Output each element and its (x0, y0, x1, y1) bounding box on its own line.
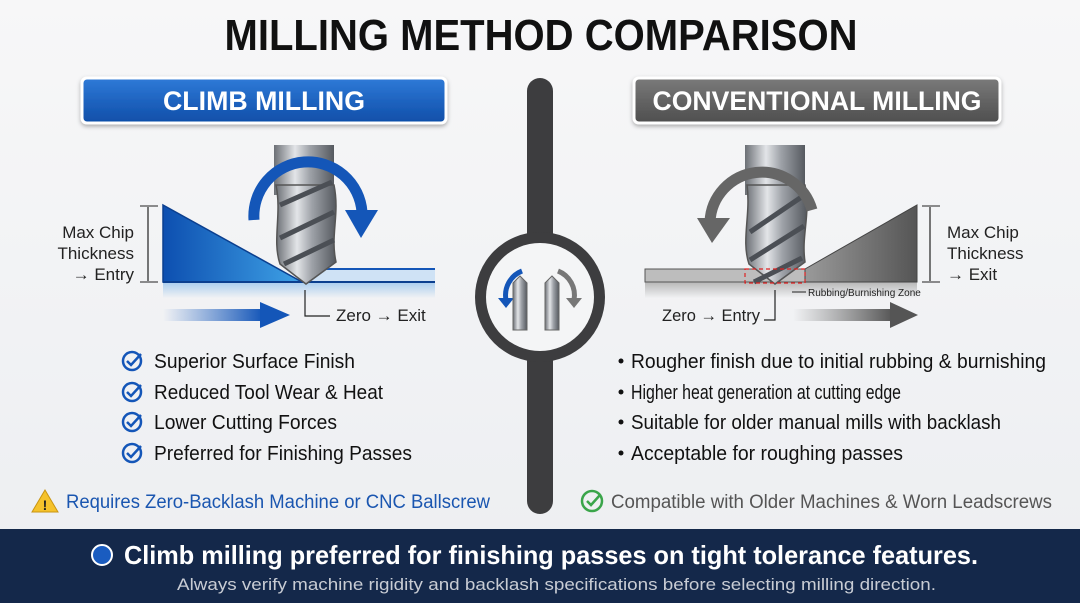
diagram: conventional milling: Zero → Entry (662, 306, 760, 325)
list: climb benefits: Preferred for Finishing Passes (154, 443, 412, 465)
icon: rotation comparison (498, 271, 582, 330)
header: climb milling (82, 78, 446, 123)
title: MILLING METHOD COMPARISON (224, 11, 858, 60)
diagram: conventional milling: Thickness (947, 244, 1024, 263)
warning note: ! (43, 497, 47, 513)
diagram: climb milling: → Entry (73, 265, 134, 284)
list: conventional characteristics: Acceptable for roughing passes (631, 443, 903, 465)
header: conventional milling (634, 78, 1000, 123)
header: conventional milling: CONVENTIONAL MILLING (652, 86, 982, 116)
dimension (147, 207, 149, 281)
list: conventional characteristics: Suitable for older manual mills with backlash (631, 412, 1001, 434)
list: conventional characteristics: Higher heat generation at cutting edge (631, 382, 901, 404)
center divider (475, 78, 605, 514)
diagram: conventional milling: Max Chip (947, 223, 1019, 242)
list: conventional characteristics (618, 351, 1046, 465)
diagram: conventional milling (645, 145, 1024, 328)
list: climb benefits: Superior Surface Finish (154, 351, 355, 373)
header: climb milling: CLIMB MILLING (163, 86, 365, 116)
compatibility note: Compatible with Older Machines & Worn Leadscrews (611, 492, 1052, 513)
diagram: climb milling: Zero → Exit (336, 306, 426, 325)
diagram: climb milling (57, 145, 435, 328)
list: climb benefits: Lower Cutting Forces (154, 412, 337, 434)
bottom banner: Climb milling preferred for finishing passes on tight tolerance features. (124, 540, 978, 570)
diagram: climb milling: Max Chip (62, 223, 134, 242)
list: climb benefits: Reduced Tool Wear & Heat (154, 382, 383, 404)
warning note: Requires Zero-Backlash Machine or CNC Ballscrew (66, 492, 490, 513)
diagram: conventional milling: → Exit (947, 265, 997, 284)
list: conventional characteristics: Rougher finish due to initial rubbing & burnishing (631, 351, 1046, 373)
diagram: climb milling: Thickness (57, 244, 134, 263)
bottom banner (0, 529, 1080, 603)
diagram: conventional milling: Rubbing/Burnishing Zone (808, 288, 921, 299)
list: climb benefits (123, 351, 412, 465)
bottom banner: Always verify machine rigidity and backlash specifications before selecting milling direction. (177, 575, 936, 594)
tool (274, 145, 334, 195)
rotation arrow (254, 162, 362, 220)
feed arrow (163, 309, 263, 321)
